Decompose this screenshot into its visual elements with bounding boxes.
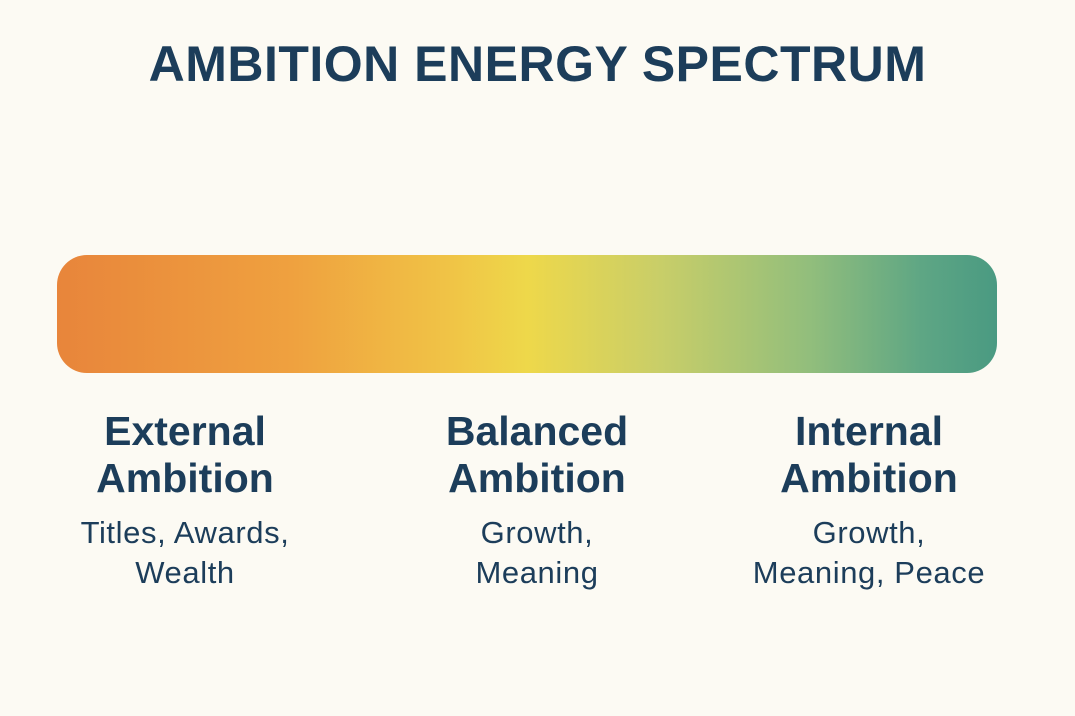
text: balanced examples: Growth, [481, 515, 593, 550]
text: internal examples: Meaning, Peace [753, 555, 985, 590]
text: external examples: Titles, Awards, [81, 515, 289, 550]
label: balanced ambition [446, 408, 628, 590]
spectrum bar [57, 255, 997, 373]
heading: external: External [104, 408, 266, 454]
title: AMBITION ENERGY SPECTRUM [149, 36, 926, 92]
heading: external: Ambition [96, 455, 274, 501]
heading: internal: Internal [795, 408, 943, 454]
heading: external [96, 408, 274, 501]
heading: internal: Ambition [780, 455, 958, 501]
heading: balanced: Balanced [446, 408, 628, 454]
text: internal examples [753, 515, 985, 590]
text: balanced examples: Meaning [475, 555, 599, 590]
heading: internal [780, 408, 958, 501]
label: external ambition [81, 408, 289, 590]
heading: balanced: Ambition [448, 455, 626, 501]
heading: balanced [446, 408, 628, 501]
text: internal examples: Growth, [813, 515, 925, 550]
text: balanced examples [475, 515, 599, 590]
text: external examples: Wealth [135, 555, 235, 590]
label: internal ambition [753, 408, 985, 590]
text: external examples [81, 515, 289, 590]
